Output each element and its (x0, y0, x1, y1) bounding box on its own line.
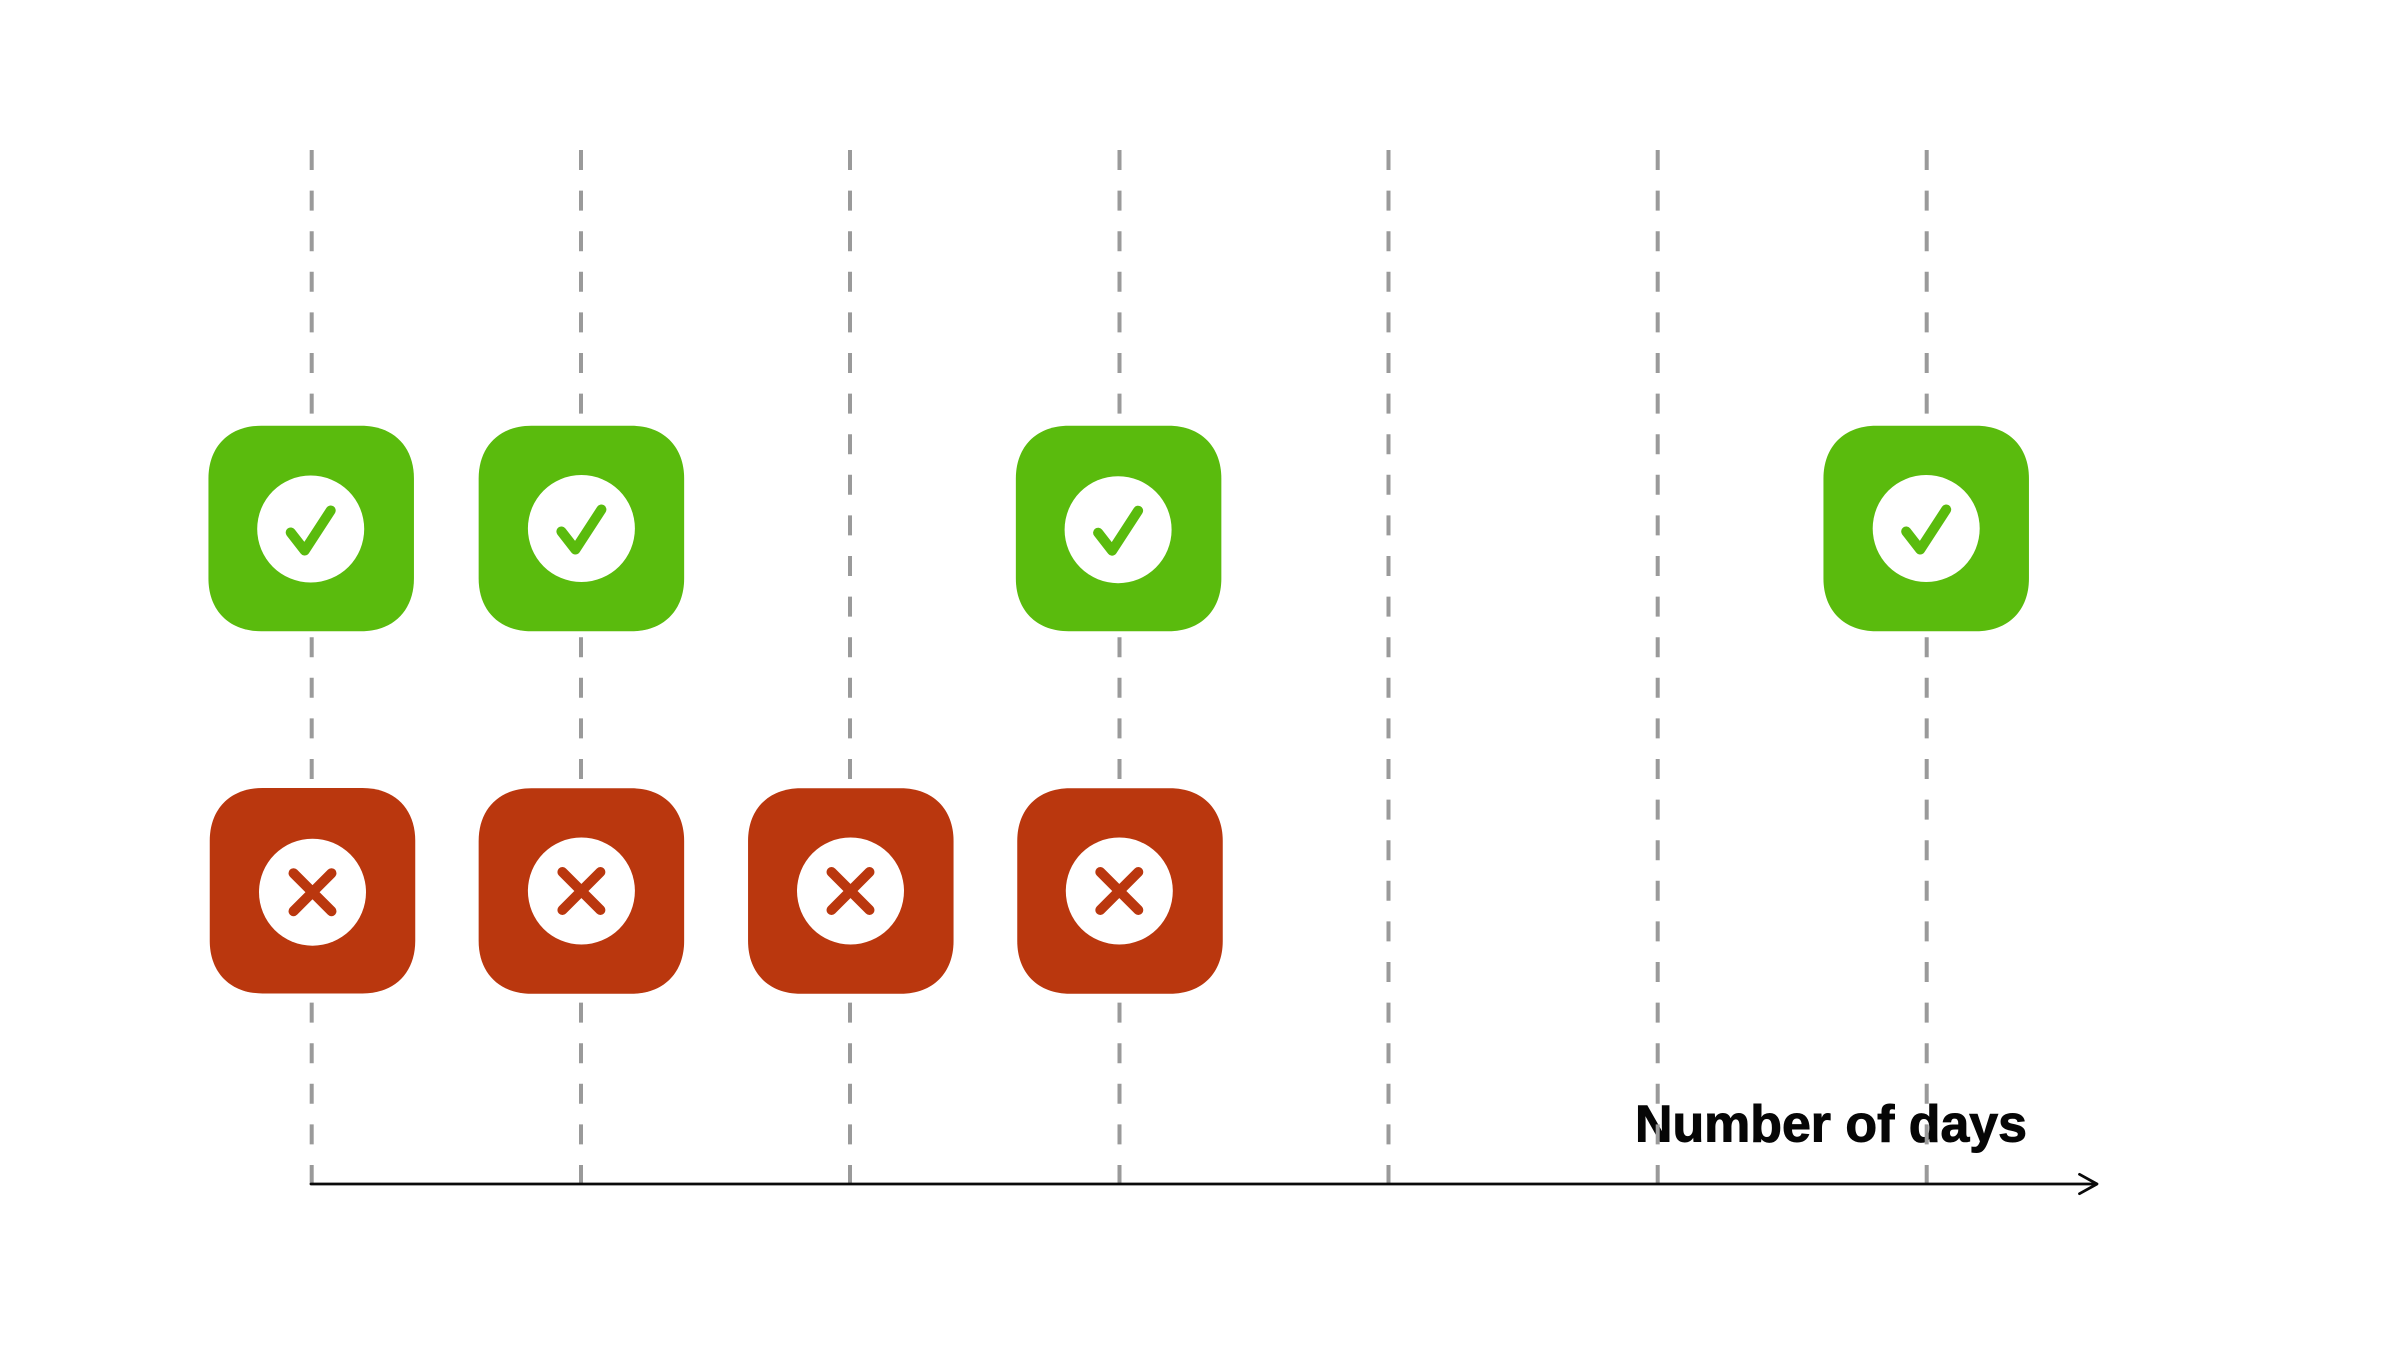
icon: red cross day 2 (479, 788, 684, 994)
icon: red cross day 1 (210, 788, 415, 993)
axis label: Number of days: Number of days (1635, 1096, 2027, 1154)
icon: green check day 4 (1016, 426, 1221, 631)
icon: green check day 7 (1823, 426, 2029, 631)
dashed day gridlines (312, 150, 1927, 1184)
icon: green check day 1 (208, 426, 414, 631)
icon: red cross day 4 (1017, 788, 1223, 994)
horizontal axis arrow (311, 1174, 2097, 1194)
icon: red cross day 3 (748, 788, 954, 994)
icon: green check day 2 (479, 426, 684, 631)
